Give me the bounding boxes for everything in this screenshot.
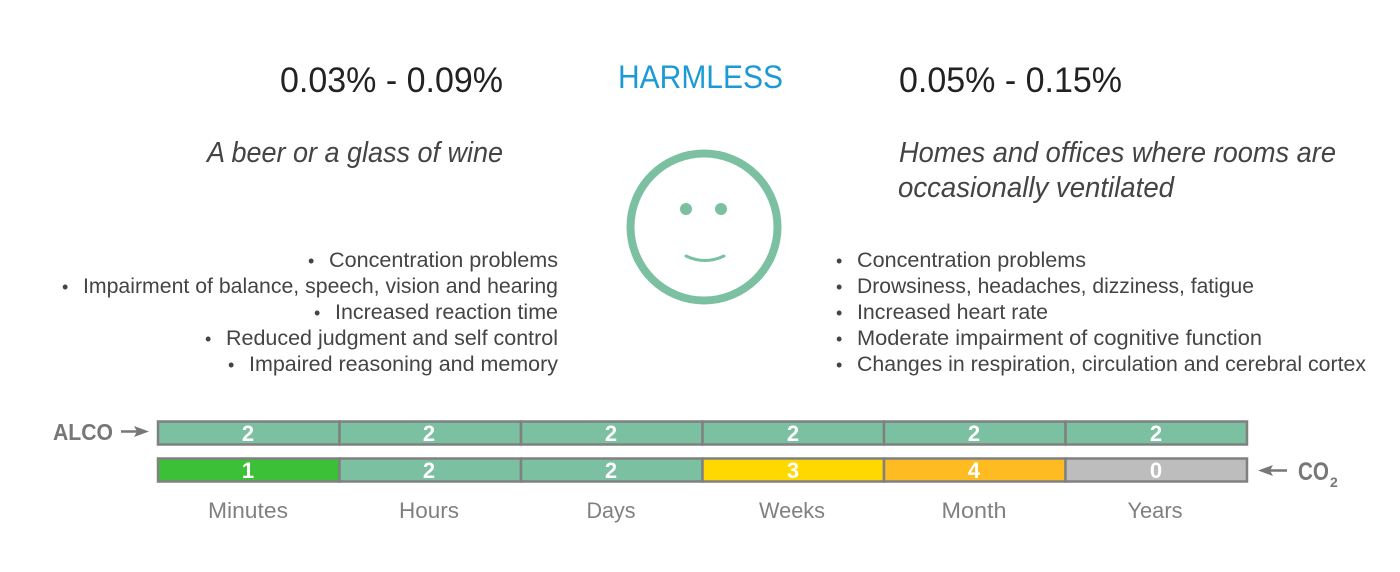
- timeline bar: ALCO: 2: [968, 421, 980, 446]
- axis labels: time scale: Years: [1128, 498, 1182, 523]
- list: CO2 symptoms: •: [836, 277, 842, 297]
- timeline bar: CO2: 0: [1150, 458, 1162, 483]
- list: alcohol symptoms: •: [228, 355, 234, 375]
- timeline bar: ALCO: 2: [423, 421, 435, 446]
- heading: alcohol percentage range: 0.03% - 0.09%: [280, 61, 503, 100]
- label: ALCO with arrow: ALCO: [53, 419, 113, 445]
- list: CO2 symptoms: •: [836, 303, 842, 323]
- list: CO2 symptoms: Changes in respiration, circulation and cerebral cortex: [857, 353, 1366, 376]
- list: alcohol symptoms: [62, 249, 558, 376]
- label: CO2 with arrow: [1258, 458, 1338, 490]
- label: ALCO with arrow: [53, 419, 149, 445]
- text: CO2 environment: Homes and offices where rooms are: [899, 137, 1336, 169]
- label: CO2 with arrow: CO: [1298, 458, 1329, 486]
- list: CO2 symptoms: [836, 249, 1366, 376]
- list: CO2 symptoms: Concentration problems: [857, 249, 1086, 272]
- timeline bar: CO2: 2: [423, 458, 435, 483]
- list: alcohol symptoms: •: [205, 329, 211, 349]
- timeline bar: CO2: 3: [787, 458, 799, 483]
- axis labels: time scale: Minutes: [208, 498, 288, 523]
- text: CO2 environment: occasionally ventilated: [898, 172, 1175, 204]
- text: CO2 environment: [898, 137, 1336, 204]
- text: alcohol equivalent: A beer or a glass of wine: [205, 137, 503, 169]
- list: CO2 symptoms: •: [836, 251, 842, 271]
- timeline bar: ALCO: [158, 421, 1247, 446]
- label: CO2 with arrow: 2: [1330, 474, 1338, 490]
- axis labels: time scale: Weeks: [759, 498, 825, 523]
- axis labels: time scale: Month: [942, 498, 1006, 523]
- timeline bar: ALCO: 2: [242, 421, 254, 446]
- timeline bar: ALCO: 2: [1150, 421, 1162, 446]
- heading: CO2 percentage range: 0.05% - 0.15%: [899, 61, 1122, 100]
- list: alcohol symptoms: •: [308, 251, 314, 271]
- list: CO2 symptoms: •: [836, 355, 842, 375]
- timeline bar: CO2: 1: [242, 458, 254, 483]
- axis labels: time scale: Days: [586, 498, 636, 523]
- timeline bar: CO2: [158, 458, 1247, 483]
- icon: smiling face: [630, 154, 778, 300]
- list: alcohol symptoms: •: [314, 303, 320, 323]
- list: CO2 symptoms: •: [836, 329, 842, 349]
- heading: harmless: HARMLESS: [618, 59, 783, 95]
- list: alcohol symptoms: Concentration problems: [329, 249, 558, 272]
- axis labels: time scale: Hours: [399, 498, 459, 523]
- list: CO2 symptoms: Increased heart rate: [857, 301, 1048, 324]
- list: alcohol symptoms: Impairment of balance, speech, vision and hearing: [83, 275, 558, 298]
- timeline bar: ALCO: 2: [605, 421, 617, 446]
- list: alcohol symptoms: Reduced judgment and self control: [226, 327, 558, 350]
- list: alcohol symptoms: Increased reaction time: [335, 301, 558, 324]
- axis labels: time scale: [208, 498, 1182, 523]
- list: CO2 symptoms: Drowsiness, headaches, dizziness, fatigue: [857, 275, 1254, 298]
- list: CO2 symptoms: Moderate impairment of cognitive function: [857, 327, 1262, 350]
- timeline bar: CO2: 2: [605, 458, 617, 483]
- timeline bar: ALCO: 2: [787, 421, 799, 446]
- list: alcohol symptoms: •: [62, 277, 68, 297]
- timeline bar: CO2: 4: [968, 458, 981, 483]
- list: alcohol symptoms: Impaired reasoning and memory: [249, 353, 558, 376]
